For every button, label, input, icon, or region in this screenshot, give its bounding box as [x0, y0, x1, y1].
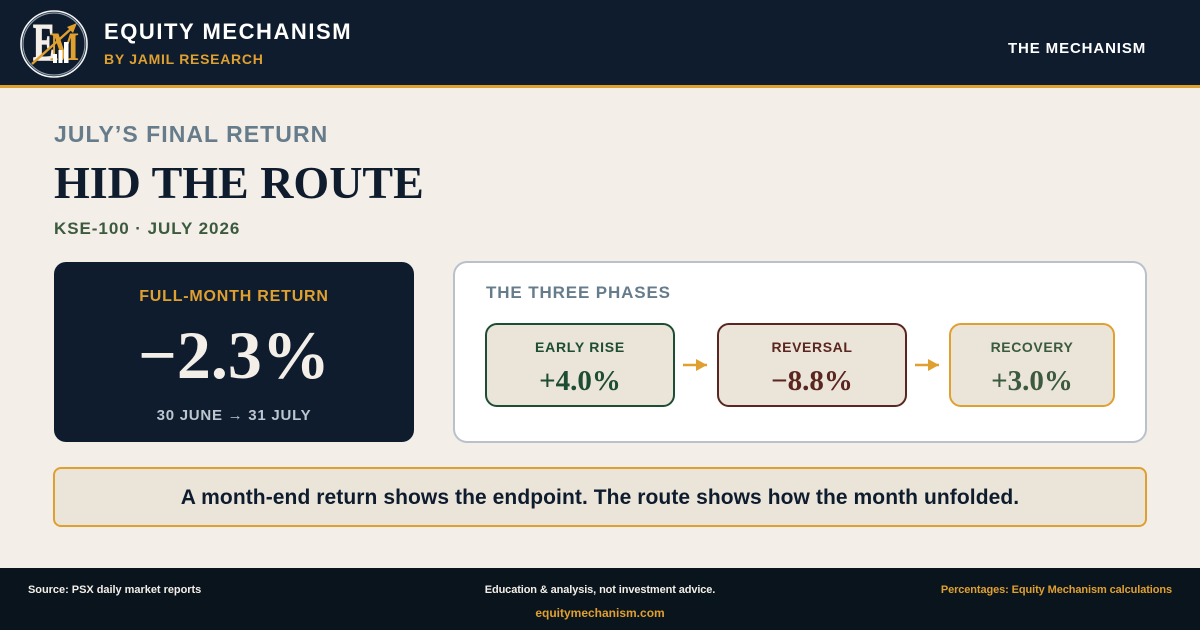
website: equitymechanism.com: [535, 606, 665, 620]
phase label: EARLY RISE: [535, 339, 625, 355]
phase label: REVERSAL: [771, 339, 853, 355]
header band: [0, 0, 1200, 88]
callout: [53, 467, 1147, 527]
phase label: RECOVERY: [991, 339, 1073, 355]
callout text: A month-end return shows the endpoint. The route shows how the month unfolded.: [181, 486, 1019, 509]
logo: M: [50, 24, 79, 69]
return value: −2.3%: [138, 317, 330, 393]
panel label: FULL-MONTH RETURN: [139, 288, 329, 305]
logo: [20, 10, 88, 78]
arrow: [915, 359, 939, 371]
logo: E: [33, 14, 55, 72]
brand title: EQUITY MECHANISM: [104, 19, 352, 44]
index and date line: KSE-100 · JULY 2026: [54, 219, 240, 238]
date range: 30 JUNE → 31 JULY: [157, 407, 311, 424]
main title: HID THE ROUTE: [54, 157, 424, 208]
phases heading: THE THREE PHASES: [486, 283, 671, 302]
phase: reversal: [717, 323, 907, 407]
panel: three phases: [453, 261, 1147, 443]
phase: recovery: [949, 323, 1115, 407]
phase value: +3.0%: [991, 365, 1073, 397]
footer band: [0, 568, 1200, 630]
arrow: [683, 359, 707, 371]
section label: THE MECHANISM: [1008, 40, 1146, 57]
brand subtitle: BY JAMIL RESEARCH: [104, 51, 264, 67]
kicker: JULY’S FINAL RETURN: [54, 121, 328, 147]
phase value: +4.0%: [539, 365, 621, 397]
panel: full-month return: [54, 262, 414, 442]
phase value: −8.8%: [771, 365, 853, 397]
calculation note: Percentages: Equity Mechanism calculations: [941, 584, 1172, 596]
source note: Source: PSX daily market reports: [28, 584, 201, 596]
phase: early rise: [485, 323, 675, 407]
disclaimer: Education & analysis, not investment advice.: [485, 584, 715, 596]
